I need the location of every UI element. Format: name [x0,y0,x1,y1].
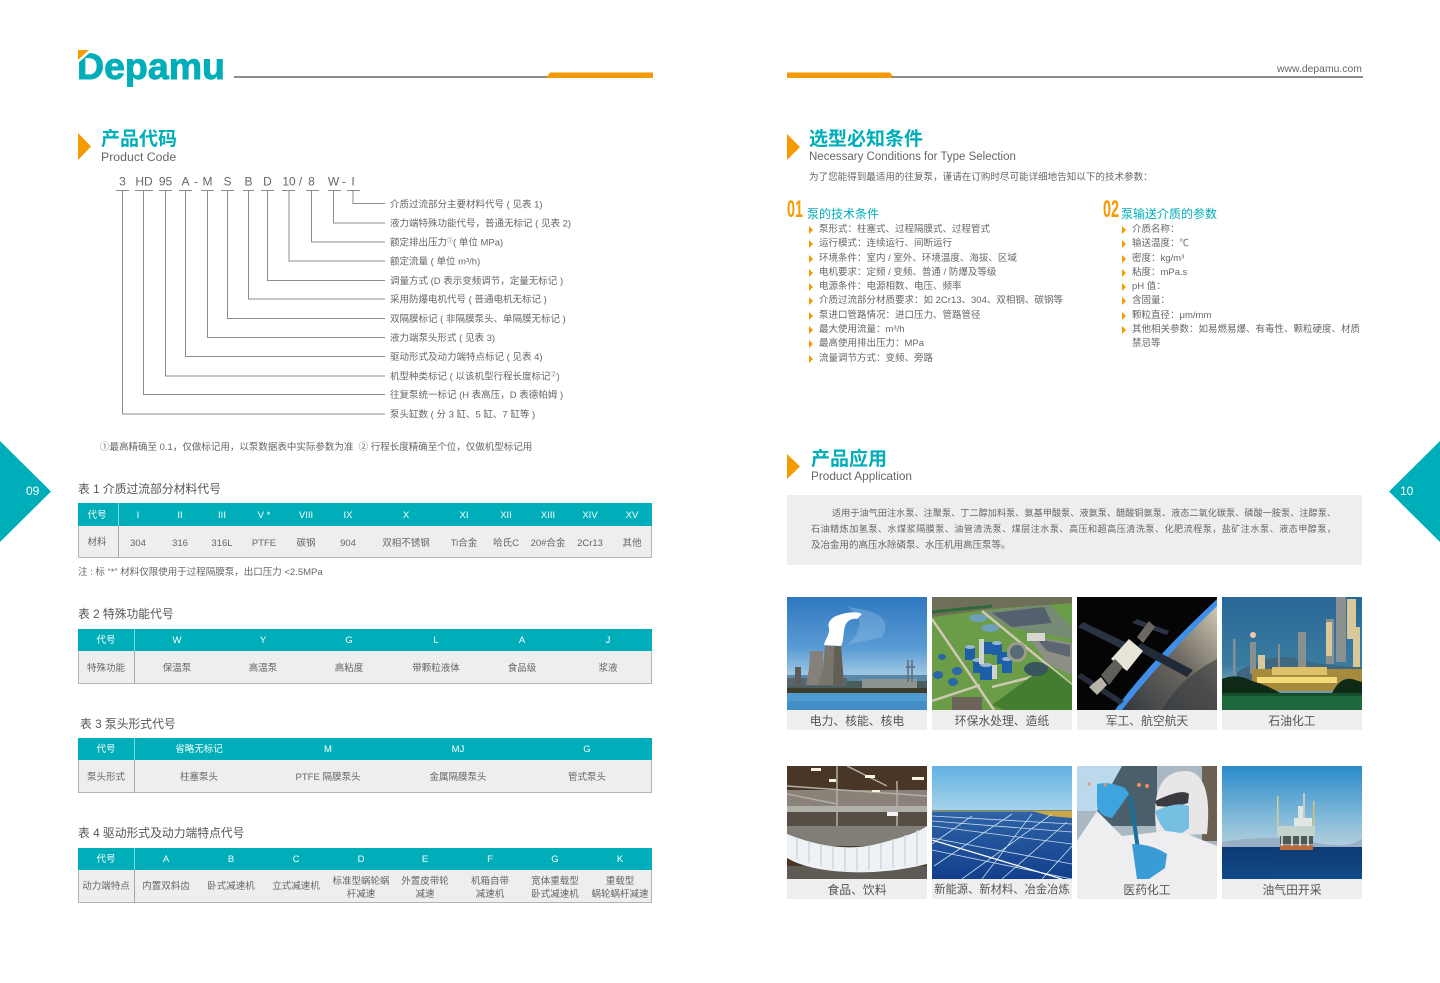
caption: 环保水处理、造纸 [955,714,1049,728]
section 02 list: 介质名称： [1132,224,1180,235]
product code diagram: 泵头缸数 ( 分 3 缸、5 缸、7 缸等 ) [390,408,535,420]
table 3: pump head codes: M [324,744,332,755]
table 1 title: 表 1 介质过流部分材料代号 [78,482,221,496]
caption [932,710,1072,730]
product code diagram: 额定流量 ( 单位 m³/h) [390,256,480,268]
table 1: wetted material codes: III [218,510,226,520]
table 4: drive type codes: 杆减速 [347,888,375,900]
section 02 list: 输送温度：℃ [1132,238,1189,249]
table 3: pump head codes: 省略无标记 [175,744,223,755]
table 4: drive type codes: F [487,854,493,865]
section 02 list: 禁忌等 [1132,338,1161,349]
photo card: environmental water treatment [932,597,1072,730]
table 1: wetted material codes: 2Cr13 [577,538,603,548]
caption [787,879,927,899]
section 01 list: 流量调节方式：变频、旁路 [819,353,933,364]
heading: product application: Product Application [811,469,912,483]
table 2: special function codes: A [519,635,525,646]
table 4: drive type codes: 蜗轮蜗杆减速 [591,888,649,900]
application text panel: 适用于油气田注水泵、注聚泵、丁二醇加料泵、氨基甲酸泵、液氨泵、醋酸铜氨泵、液态二氧化碳泵、磷酸一胺泵、注醇泵、 [832,508,1336,518]
product code diagram: ① [447,236,453,244]
product code diagram: ( 单位 MPa) [453,236,503,248]
heading: selection conditions: 选型必知条件 [809,129,923,150]
table 4: drive type codes [78,848,652,903]
table 1: wetted material codes: 代号 [87,510,107,520]
product code diagram: - [342,174,346,188]
product code diagram: W [328,174,340,188]
caption: 新能源、新材料、冶金冶炼 [934,884,1070,896]
product code diagram: S [223,174,232,188]
section 01 number: 01 [787,196,803,223]
caption [1222,879,1362,899]
section 01 list: 电源条件：电源相数、电压、频率 [819,281,962,292]
table 2: special function codes: Y [260,635,266,646]
table 2: special function codes: 代号 [96,635,116,646]
section 01 list: 泵进口管路情况：进口压力、管路管径 [819,310,981,321]
table 1: wetted material codes: II [177,510,183,520]
heading: product code [78,128,177,164]
caption [1222,710,1362,730]
table 1: wetted material codes: I [137,510,139,520]
table 4: drive type codes: 立式减速机 [272,881,320,892]
section 02 list [1122,224,1360,349]
section 01 list: 最高使用排出压力：MPa [819,338,924,349]
section 02 list: pH 值： [1132,281,1166,292]
section 01 list: 泵形式：柱塞式、过程隔膜式、过程管式 [819,224,990,235]
section 01 list: 电机要求：定频 / 变频、普通 / 防爆及等级 [819,267,996,278]
page tab 09: 09 [26,484,39,498]
table 1: wetted material codes: 其他 [622,538,642,548]
product code diagram: B [244,174,253,188]
table 2: special function codes: 浆液 [598,662,618,674]
heading: selection conditions: Necessary Conditions for Type Selection [809,150,1016,162]
table 1: wetted material codes: XI [460,510,468,520]
heading: product application [787,448,912,483]
caption [1077,879,1217,899]
table 2: special function codes: 高粘度 [335,662,363,674]
product code diagram: M [202,174,212,188]
table 1: wetted material codes: IX [344,510,352,520]
table 4: drive type codes: 动力端特点 [82,881,130,892]
table 1: wetted material codes: 双相不锈钢 [382,538,430,548]
table 4: drive type codes: 减速 [415,888,435,900]
caption [787,710,927,730]
table 3: pump head codes [78,738,652,793]
table 4: drive type codes: 宽体重载型 [531,876,579,886]
caption [1077,710,1217,730]
product code diagram: 往复泵统一标记 (H 表高压，D 表德帕姆 ) [390,389,563,401]
photo card: power [787,597,927,730]
table 4: drive type codes: 内置双斜齿 [142,881,190,892]
caption: 食品、饮料 [828,883,886,897]
table 4: drive type codes: 重载型 [606,876,634,886]
footnote: ①最高精确至 0.1，仅做标记用，以泵数据表中实际参数为准 ② 行程长度精确至个位，仅做机型标记用 [100,442,532,452]
table 1: wetted material codes: 20#合金 [531,538,565,548]
heading: product application: 产品应用 [811,449,887,470]
page tab 09 [0,441,51,542]
section 01 list: 最大使用流量：m³/h [819,324,905,335]
table 3: pump head codes: 代号 [96,744,116,755]
section 02 list: 密度：kg/m³ [1132,253,1184,264]
product code diagram [116,174,571,420]
product code diagram: 液力端泵头形式 ( 见表 3) [390,332,495,344]
table 1: wetted material codes: VIII [299,510,313,520]
table 1: wetted material codes: 904 [340,538,356,548]
product code diagram: / [299,174,303,188]
product code diagram: ② [550,370,556,378]
product code diagram: 10 [282,174,296,188]
table 4: drive type codes: A [163,854,169,865]
product code diagram: 机型种类标记 ( 以该机型行程长度标记 [390,372,550,382]
product code diagram: 采用防爆电机代号 ( 普通电机无标记 ) [390,294,547,306]
table 1: wetted material codes: 316 [172,538,188,548]
table 2: special function codes: 带颗粒液体 [412,662,460,674]
website url: www.depamu.com [1277,64,1362,74]
caption: 医药化工 [1123,883,1171,897]
section 02 list: 颗粒直径：μm/mm [1132,310,1211,321]
table 2: special function codes: J [606,635,610,646]
caption: 电力、核能、核电 [810,714,904,728]
product code diagram: 驱动形式及动力端特点标记 ( 见表 4) [390,351,543,363]
section 01 list: 运行模式：连续运行、间断运行 [819,238,952,249]
table 1: wetted material codes: 材料 [87,537,107,548]
application text panel: 及冶金用的高压水除磷泵、水压机用高压泵等。 [811,540,1011,551]
photo card: military aerospace [1077,597,1217,730]
header rule left [234,72,653,78]
table 4: drive type codes: 卧式减速机 [531,888,579,900]
product code diagram: 8 [308,174,315,188]
table 4: drive type codes: C [293,854,299,865]
caption: 油气田开采 [1262,883,1322,897]
table 4: drive type codes: D [358,854,364,865]
table 1: wetted material codes: 316L [211,538,233,548]
table 1: wetted material codes: V * [258,510,270,520]
table 1 note: 注 : 标 “*” 材料仅限使用于过程隔膜泵，出口压力 <2.5MPa [78,566,323,578]
table 1: wetted material codes: 304 [130,538,146,548]
page tab 10 [1389,441,1440,542]
table 4: drive type codes: 标准型蜗轮蜗 [332,876,390,886]
product code diagram: 液力端特殊功能代号，普通无标记 ( 见表 2) [390,218,571,230]
table 2: special function codes: G [345,635,353,646]
table 4: drive type codes: 外置皮带轮 [401,876,449,886]
table 2 title: 表 2 特殊功能代号 [78,606,174,620]
table 1: wetted material codes: Ti合金 [451,538,477,548]
table 1: wetted material codes: XIV [582,510,598,520]
section 02 list: 含固量： [1132,295,1170,306]
product code diagram: D [263,174,272,188]
table 4: drive type codes: 卧式减速机 [207,881,255,892]
table 4: drive type codes: B [228,854,234,865]
table 3: pump head codes: PTFE 隔膜泵头 [296,772,360,782]
table 3: pump head codes: G [583,744,591,755]
table 4: drive type codes: E [422,854,428,865]
application text panel: 石油精炼加氢泵、水煤浆隔膜泵、油管清洗泵、煤层注水泵、高压和超高压清洗泵、化肥流程泵，盐矿注水泵、液态甲醇泵， [811,524,1336,534]
application text panel [787,495,1362,565]
table 3 title: 表 3 泵头形式代号 [80,716,176,730]
table 3: pump head codes: MJ [452,744,464,755]
heading: product code: Product Code [101,150,176,164]
section 02 heading: 泵输送介质的参数 [1121,206,1217,220]
caption: 石油化工 [1268,714,1316,728]
table 4: drive type codes: 代号 [96,854,116,865]
table 2: special function codes: L [433,635,439,646]
table 4: drive type codes: K [617,854,623,865]
table 1: wetted material codes: 哈氏C [493,538,519,548]
section 02 list: 粘度：mPa.s [1132,267,1187,278]
product code diagram: 额定排出压力 [390,238,447,248]
table 3: pump head codes: 管式泵头 [568,772,606,782]
page tab 10: 10 [1400,484,1413,498]
logo: Depamu: Depamu [77,45,225,87]
table 4: drive type codes: G [551,854,559,865]
table 4 title: 表 4 驱动形式及动力端特点代号 [78,826,244,840]
table 3: pump head codes: 柱塞泵头 [180,772,218,782]
product code diagram: I [351,174,355,188]
photo card: food and beverage [787,766,927,899]
header rule right [787,72,1363,78]
product code diagram: 95 [159,174,172,188]
heading: product code: 产品代码 [101,129,177,150]
photo card: pharma and chemical [1077,766,1217,899]
table 2: special function codes: W [173,635,181,646]
table 2: special function codes: 食品级 [508,662,536,674]
product code diagram: 介质过流部分主要材料代号 ( 见表 1) [390,198,543,210]
table 1: wetted material codes: PTFE [252,538,276,548]
heading: selection conditions [787,128,1016,162]
section 01 heading: 泵的技术条件 [807,206,879,220]
section 01 list: 介质过流部分材质要求：如 2Cr13、304、双相钢、碳钢等 [819,295,1063,306]
table 1: wetted material codes: XIII [541,510,555,520]
table 3: pump head codes: 金属隔膜泵头 [429,772,487,782]
product code diagram: A [181,174,190,188]
product code diagram: - [194,174,198,188]
section 02 number: 02 [1103,196,1119,223]
table 1: wetted material codes [78,503,652,558]
table 2: special function codes: 高温泵 [249,662,277,674]
table 1: wetted material codes: X [403,510,409,520]
product code diagram: 调量方式 (D 表示变频调节，定量无标记 ) [390,275,563,287]
section 01 list [809,224,1063,364]
table 1: wetted material codes: 碳钢 [296,538,316,548]
caption: 军工、航空航天 [1106,714,1188,728]
table 4: drive type codes: 减速机 [476,888,504,900]
photo card: petrochemical [1222,597,1362,730]
intro text: 为了您能得到最适用的往复泵，谨请在订购时尽可能详细地告知以下的技术参数： [809,172,1153,183]
table 2: special function codes: 保温泵 [163,662,191,674]
table 1: wetted material codes: XV [626,510,638,520]
photo card: new energy [932,766,1072,899]
product code diagram: 3 [119,174,126,188]
table 2: special function codes: 特殊功能 [87,662,125,674]
photo card: oil and gas field [1222,766,1362,899]
caption [932,879,1072,899]
section 01 list: 环境条件：室内 / 室外、环境温度、海拔、区域 [819,253,1017,264]
product code diagram: HD [135,174,153,188]
table 4: drive type codes: 机箱自带 [471,876,509,886]
section 02 list: 其他相关参数：如易燃易爆、有毒性、颗粒硬度、材质 [1132,324,1360,335]
product code diagram: ) [556,372,560,382]
product code diagram: 双隔膜标记 ( 非隔膜泵头、单隔膜无标记 ) [390,313,566,325]
table 2: special function codes [78,629,652,684]
table 1: wetted material codes: XII [500,510,512,520]
table 3: pump head codes: 泵头形式 [87,772,125,782]
